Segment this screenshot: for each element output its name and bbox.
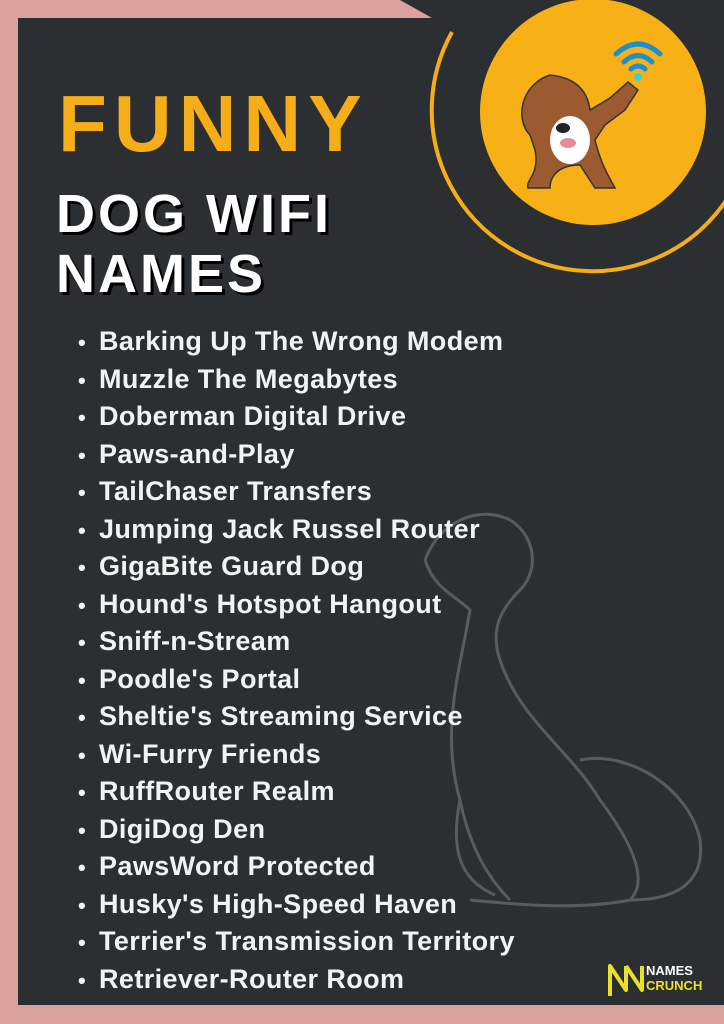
list of names: Jumping Jack Russel Router (99, 514, 480, 544)
list of names: Terrier's Transmission Territory (99, 926, 515, 956)
logo (608, 963, 702, 996)
list of names: DigiDog Den (99, 814, 265, 844)
list of names: Muzzle The Megabytes (99, 364, 398, 394)
list of names: TailChaser Transfers (99, 476, 372, 506)
logo: NAMES (646, 963, 693, 978)
list of names: Hound's Hotspot Hangout (99, 588, 442, 618)
list of names: Paws-and-Play (99, 438, 295, 468)
list of names: Husky's High-Speed Haven (99, 888, 457, 918)
list of names: PawsWord Protected (99, 851, 376, 881)
list of names: Retriever-Router Room (99, 964, 404, 994)
list of names: Doberman Digital Drive (99, 401, 406, 431)
logo: CRUNCH (646, 978, 702, 993)
list of names: Sniff-n-Stream (99, 626, 291, 656)
list of names (78, 326, 515, 994)
text: DOG WIFI (56, 184, 332, 244)
badge: dog in circle with wifi (430, 0, 724, 274)
list of names: Poodle's Portal (99, 664, 300, 694)
pink top corner (18, 0, 432, 18)
list of names: Wi-Furry Friends (99, 738, 321, 768)
text: NAMES (56, 244, 266, 304)
dog sketch background (424, 512, 702, 908)
list of names: Sheltie's Streaming Service (99, 701, 463, 731)
list of names: GigaBite Guard Dog (99, 551, 364, 581)
text: FUNNY (58, 79, 369, 168)
list of names: Barking Up The Wrong Modem (99, 326, 503, 356)
title (56, 79, 369, 304)
list of names: RuffRouter Realm (99, 776, 335, 806)
